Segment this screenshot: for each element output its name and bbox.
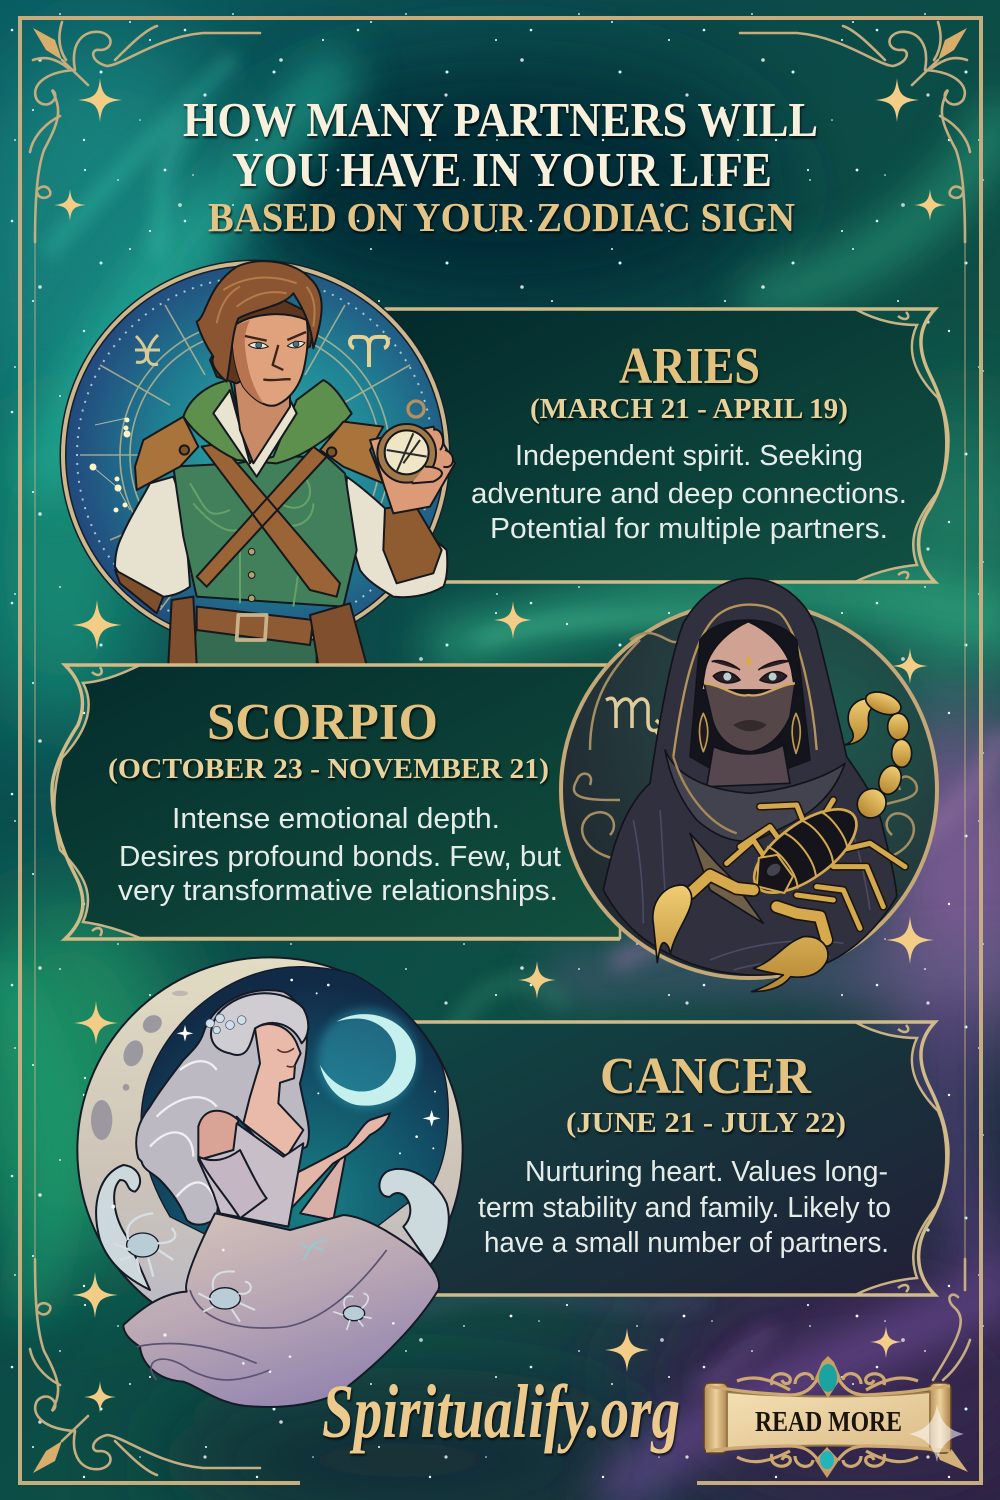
bracer xyxy=(383,505,442,583)
scroll ornaments xyxy=(574,633,917,860)
description: scorpio: Desires profound bonds. Few, but xyxy=(119,841,561,873)
panel shape xyxy=(52,665,620,939)
scroll rolls xyxy=(704,1383,951,1453)
top gem xyxy=(815,1356,841,1398)
lips xyxy=(733,720,767,731)
moon craters xyxy=(91,991,188,1140)
illustration: scorpio medallion xyxy=(561,578,937,992)
forearm far xyxy=(300,1150,347,1220)
heading: scorpio: SCORPIO xyxy=(207,694,438,751)
description: cancer xyxy=(478,1156,891,1259)
description: cancer: have a small number of partners. xyxy=(484,1227,889,1259)
panel shape xyxy=(400,1022,948,1295)
figure: young man with compass xyxy=(115,261,455,665)
dates: aries: (MARCH 21 - APRIL 19) xyxy=(530,393,848,425)
compass xyxy=(377,401,436,483)
icon: aries glyph xyxy=(350,337,388,367)
sparkle watermark xyxy=(909,1404,964,1462)
belt xyxy=(197,607,313,645)
crab on moon xyxy=(113,1213,175,1277)
title line 1: HOW MANY PARTNERS WILL xyxy=(183,92,818,147)
glowing crescent xyxy=(317,1008,417,1108)
eyes and brows xyxy=(712,661,790,683)
bodice xyxy=(198,1123,303,1227)
vest pattern xyxy=(190,480,313,607)
hair xyxy=(197,261,322,382)
eyes xyxy=(248,341,305,348)
crescent moon xyxy=(77,957,463,1343)
description: aries: Independent spirit. Seeking xyxy=(515,440,863,472)
description: scorpio xyxy=(118,803,561,907)
lower tunic xyxy=(190,627,317,665)
parchment xyxy=(727,1392,930,1450)
crab on skirt xyxy=(333,1293,372,1330)
panel: scorpio xyxy=(52,665,620,939)
hair back xyxy=(210,283,317,383)
forehead mark xyxy=(745,655,752,667)
dress xyxy=(123,1213,439,1407)
veil lower face xyxy=(704,683,795,752)
hood gold trim xyxy=(673,605,817,757)
sky stars xyxy=(177,979,441,1154)
face shading xyxy=(232,320,263,403)
description: scorpio: very transformative relationships. xyxy=(118,875,558,907)
neck veil xyxy=(707,745,790,787)
floral motif xyxy=(300,1240,327,1260)
ribbon tail xyxy=(935,1447,968,1472)
title line 2: YOU HAVE IN YOUR LIFE xyxy=(232,142,772,197)
bottom gem xyxy=(815,1447,839,1478)
scorpion legs xyxy=(727,800,905,928)
panel shape xyxy=(385,309,948,582)
description: cancer: Nurturing heart. Values long- xyxy=(525,1156,888,1188)
description: aries: adventure and deep connections. xyxy=(471,478,907,510)
description: aries: Potential for multiple partners. xyxy=(490,513,888,545)
heading: cancer: CANCER xyxy=(600,1048,812,1105)
cloak and hood xyxy=(603,578,897,975)
vest buttons xyxy=(248,548,255,602)
face xyxy=(702,622,795,690)
hair front xyxy=(211,993,308,1055)
crossed straps xyxy=(197,443,340,597)
night sky xyxy=(141,967,448,1283)
hood xyxy=(183,380,352,463)
figure: hooded woman with scorpion xyxy=(603,578,912,992)
decorative gold sparkles xyxy=(54,78,946,1413)
scorpion tail xyxy=(845,688,912,824)
hair xyxy=(690,620,810,770)
pouches xyxy=(168,597,367,665)
face xyxy=(232,314,308,406)
right wave xyxy=(379,1169,449,1265)
button: read more scroll xyxy=(704,1356,968,1478)
hip hand xyxy=(115,570,163,613)
description: scorpio: Intense emotional depth. xyxy=(172,803,500,835)
description: aries xyxy=(471,440,907,545)
vest xyxy=(173,457,357,607)
medallion disc xyxy=(561,602,937,978)
illustration: cancer moon xyxy=(77,957,463,1407)
icon: scorpio glyph xyxy=(606,698,664,734)
scarf gold edge xyxy=(673,757,737,833)
scorpion body xyxy=(741,794,870,908)
face and neck xyxy=(243,1024,303,1157)
forearm near xyxy=(260,1113,390,1213)
dress folds xyxy=(137,1250,387,1380)
veil trim xyxy=(704,683,795,696)
head scarf xyxy=(665,750,845,841)
heading: aries: ARIES xyxy=(619,338,760,395)
sleeves and arm xyxy=(115,477,447,597)
panel: aries xyxy=(385,309,948,582)
chest xyxy=(690,833,763,923)
hair strands xyxy=(150,1004,297,1203)
hair flowers xyxy=(206,1014,246,1034)
subtitle: BASED ON YOUR ZODIAC SIGN xyxy=(208,194,795,240)
label: READ MORE xyxy=(755,1406,902,1438)
scorpion claw arms xyxy=(690,875,827,940)
zodiac wheel xyxy=(63,263,447,647)
closed eye and mouth xyxy=(277,1048,295,1067)
pauldrons xyxy=(135,417,383,490)
shoulder xyxy=(198,1111,238,1163)
description: cancer: term stability and family. Likely to xyxy=(478,1192,891,1224)
hair back xyxy=(136,990,309,1225)
top filigree xyxy=(706,1374,950,1395)
neck xyxy=(233,377,290,463)
panel: cancer xyxy=(400,1022,948,1295)
illustration: aries medallion xyxy=(63,261,455,665)
cloak folds xyxy=(633,810,870,970)
left wave xyxy=(96,1165,150,1290)
sleeve xyxy=(198,1150,267,1218)
fingers xyxy=(412,430,453,483)
crab on dress xyxy=(198,1271,255,1322)
icon: pisces glyph xyxy=(135,335,160,365)
title xyxy=(183,92,818,240)
hand xyxy=(370,427,455,513)
scorpion claws xyxy=(653,885,828,992)
brand: Spiritualify.org: Spiritualify.org xyxy=(322,1370,680,1454)
brows nose mouth xyxy=(245,332,306,380)
earrings xyxy=(699,713,800,753)
dates: cancer: (JUNE 21 - JULY 22) xyxy=(566,1107,846,1139)
dates: scorpio: (OCTOBER 23 - NOVEMBER 21) xyxy=(108,753,549,785)
bottom filigree xyxy=(706,1446,950,1466)
dress sparkle xyxy=(111,1205,395,1373)
